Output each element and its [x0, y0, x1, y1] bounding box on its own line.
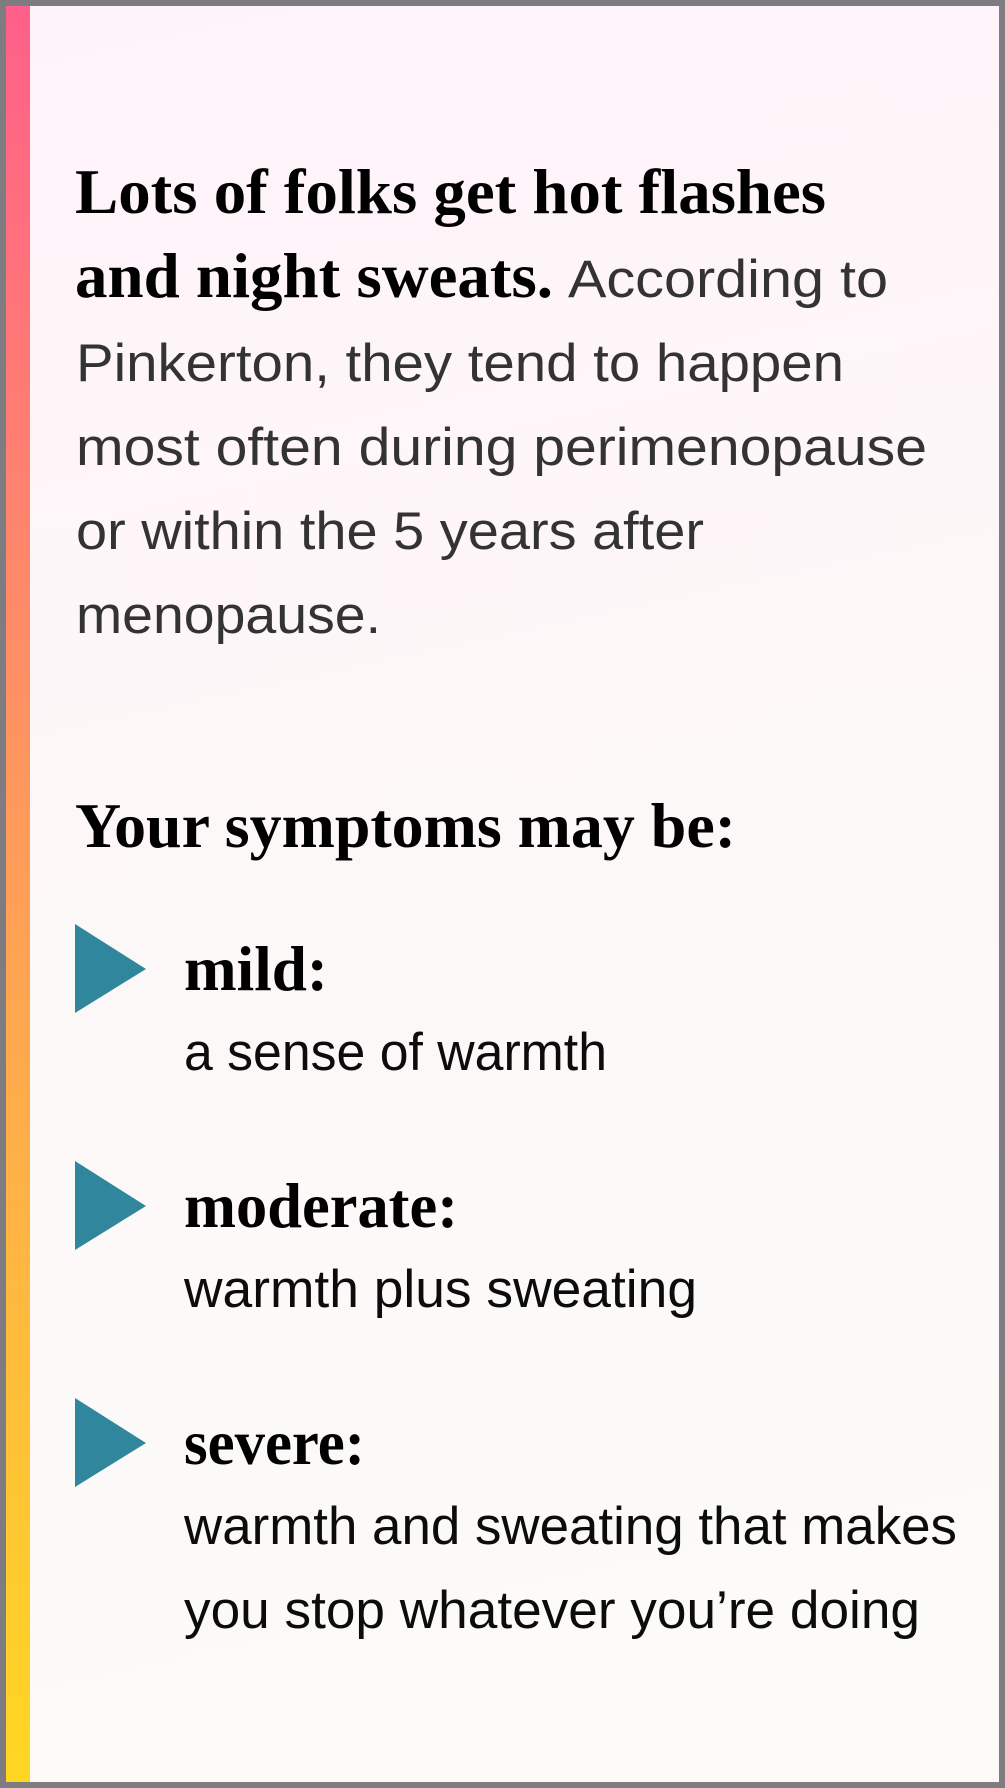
severe description: warmth and sweating that makes — [183, 1497, 957, 1556]
gradient side bar — [6, 6, 30, 1782]
severe description — [183, 1497, 957, 1640]
icon: severe triangle — [75, 1398, 146, 1487]
heading: your symptoms: Your symptoms may be: — [75, 791, 736, 861]
text block: introduction: or within the 5 years after — [76, 502, 704, 561]
mild description: a sense of warmth — [184, 1023, 607, 1082]
symptom: severe — [75, 1398, 957, 1640]
severe label: severe: — [184, 1408, 365, 1478]
text block: introduction: menopause. — [76, 586, 381, 645]
mild label: mild: — [184, 934, 328, 1004]
text block: introduction — [75, 157, 927, 645]
moderate label: moderate: — [184, 1171, 458, 1241]
text block: introduction: According to — [568, 250, 888, 309]
severe description: you stop whatever you’re doing — [184, 1581, 920, 1640]
text block: introduction: most often during perimenopause — [76, 418, 927, 477]
text block: introduction: Pinkerton, they tend to happen — [76, 334, 844, 393]
text block: introduction: and night sweats. — [75, 241, 553, 311]
icon: moderate triangle — [75, 1161, 146, 1250]
moderate description: warmth plus sweating — [183, 1260, 697, 1319]
symptom: moderate — [75, 1161, 697, 1319]
icon: mild triangle — [75, 924, 146, 1013]
text block: introduction: Lots of folks get hot flashes — [75, 157, 826, 227]
symptom: mild — [75, 924, 607, 1082]
